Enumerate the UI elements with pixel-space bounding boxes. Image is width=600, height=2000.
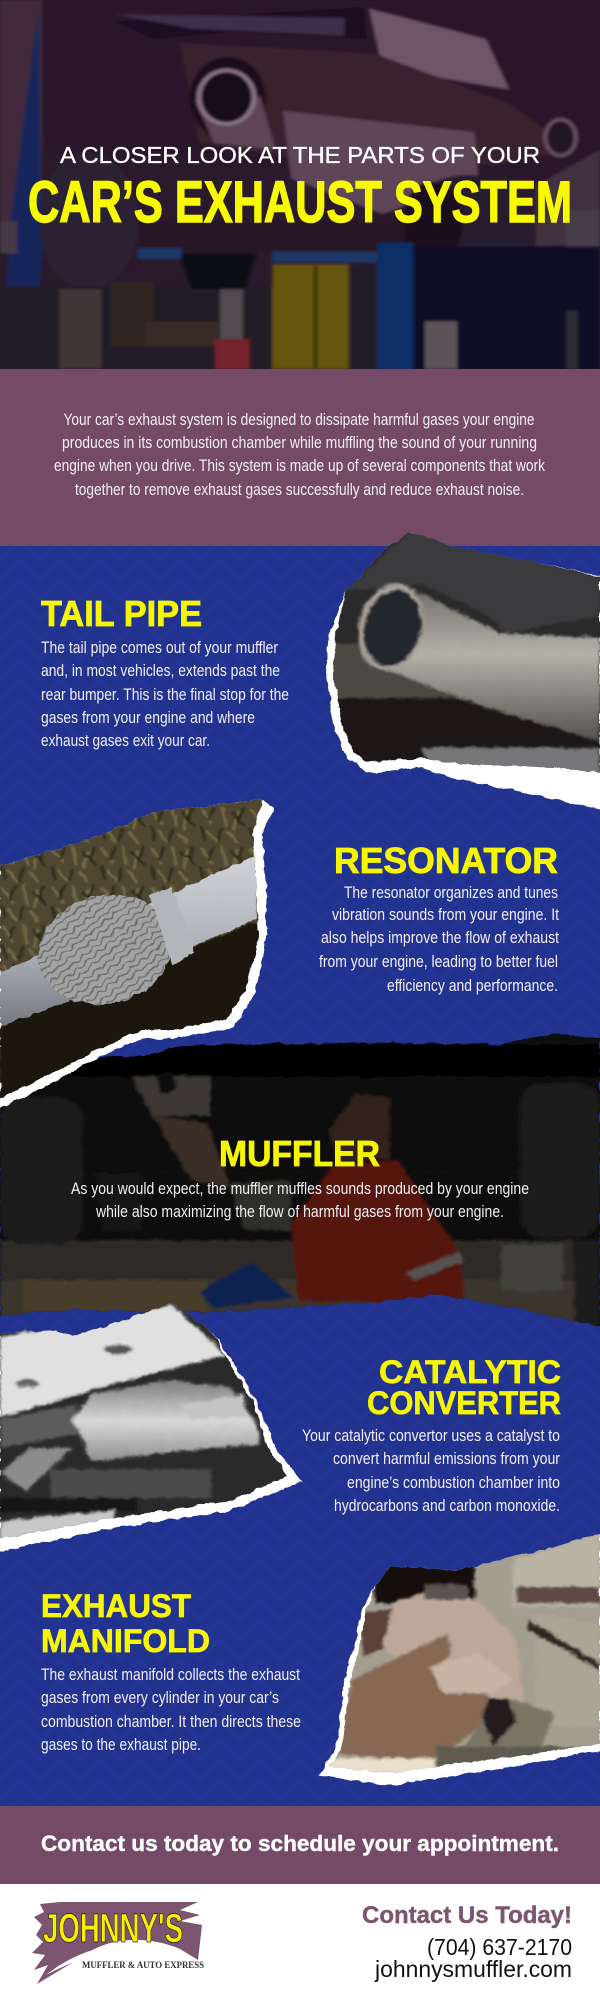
contact details: Contact Us Today! [362, 1902, 572, 1929]
contact details: johnnysmuffler.com [374, 1956, 572, 1982]
text: tail pipe: TAIL PIPE [41, 593, 202, 634]
text: exhaust manifold: combustion chamber. It then directs these [41, 1713, 301, 1731]
hero photo: car on lift with purple overlay [0, 0, 600, 369]
text: muffler: while also maximizing the flow of harmful gases from your engine. [95, 1203, 504, 1221]
text: tail pipe: exhaust gases exit your car. [41, 732, 210, 750]
panel: call to action: Contact us today to schedule your appointment. [41, 1831, 559, 1856]
text: tail pipe: gases from your engine and where [41, 709, 255, 727]
text: resonator: efficiency and performance. [387, 977, 558, 995]
text: resonator: vibration sounds from your engine. It [332, 906, 559, 924]
photo: exhaust manifold [320, 1530, 600, 1786]
text: tail pipe: The tail pipe comes out of your muffler [41, 639, 278, 657]
text: catalytic converter: convert harmful emissions from your [333, 1450, 560, 1468]
text: resonator: also helps improve the flow of exhaust [321, 929, 559, 947]
text: exhaust manifold: The exhaust manifold collects the exhaust [41, 1666, 300, 1684]
text: resonator: The resonator organizes and tunes [344, 884, 558, 902]
text: exhaust manifold: gases to the exhaust pipe. [41, 1736, 201, 1754]
text: resonator [319, 840, 559, 995]
panel: blue background [0, 546, 600, 1807]
text: catalytic converter: CATALYTIC [379, 1354, 561, 1390]
text: resonator: RESONATOR [334, 840, 558, 881]
logo: Johnny's Muffler & Auto Express: MUFFLER & AUTO EXPRESS [82, 1960, 204, 1970]
photo: catalytic converter [0, 1301, 306, 1553]
text: muffler: As you would expect, the muffler muffles sounds produced by your engine [71, 1180, 529, 1198]
text: exhaust manifold: EXHAUST [41, 1588, 191, 1624]
panel: call to action [0, 1806, 600, 1884]
title [28, 142, 572, 235]
text: exhaust manifold [41, 1588, 301, 1754]
text: muffler: MUFFLER [219, 1133, 380, 1174]
text: catalytic converter: engine’s combustion chamber into [347, 1474, 560, 1492]
panel: introduction: together to remove exhaust gases successfully and reduce exhaust noise. [75, 481, 524, 499]
text: catalytic converter: hydrocarbons and carbon monoxide. [334, 1497, 560, 1515]
text: exhaust manifold: gases from every cylinder in your car’s [41, 1689, 279, 1707]
text: catalytic converter: Your catalytic convertor uses a catalyst to [302, 1427, 560, 1445]
logo: Johnny's Muffler & Auto Express: JOHNNY'S [43, 1905, 183, 1951]
text: catalytic converter: CONVERTER [367, 1385, 561, 1421]
text: resonator: from your engine, leading to better fuel [319, 953, 558, 971]
text: catalytic converter [302, 1354, 561, 1515]
text: exhaust manifold: MANIFOLD [41, 1623, 210, 1659]
panel: footer [0, 1884, 600, 2000]
contact details: (704) 637-2170 [427, 1934, 572, 1960]
text: tail pipe: rear bumper. This is the final stop for the [41, 686, 289, 704]
text: tail pipe: and, in most vehicles, extends past the [41, 662, 280, 680]
contact details [362, 1902, 572, 1982]
photo: resonator [0, 794, 283, 1112]
text: tail pipe [41, 593, 289, 750]
logo: Johnny's Muffler & Auto Express [32, 1902, 204, 1984]
text: muffler [71, 1133, 529, 1221]
photo: tail pipe [321, 530, 600, 810]
title: A CLOSER LOOK AT THE PARTS OF YOUR [60, 142, 540, 168]
panel: introduction [0, 369, 600, 547]
photo: muffler background band [0, 1030, 600, 1330]
